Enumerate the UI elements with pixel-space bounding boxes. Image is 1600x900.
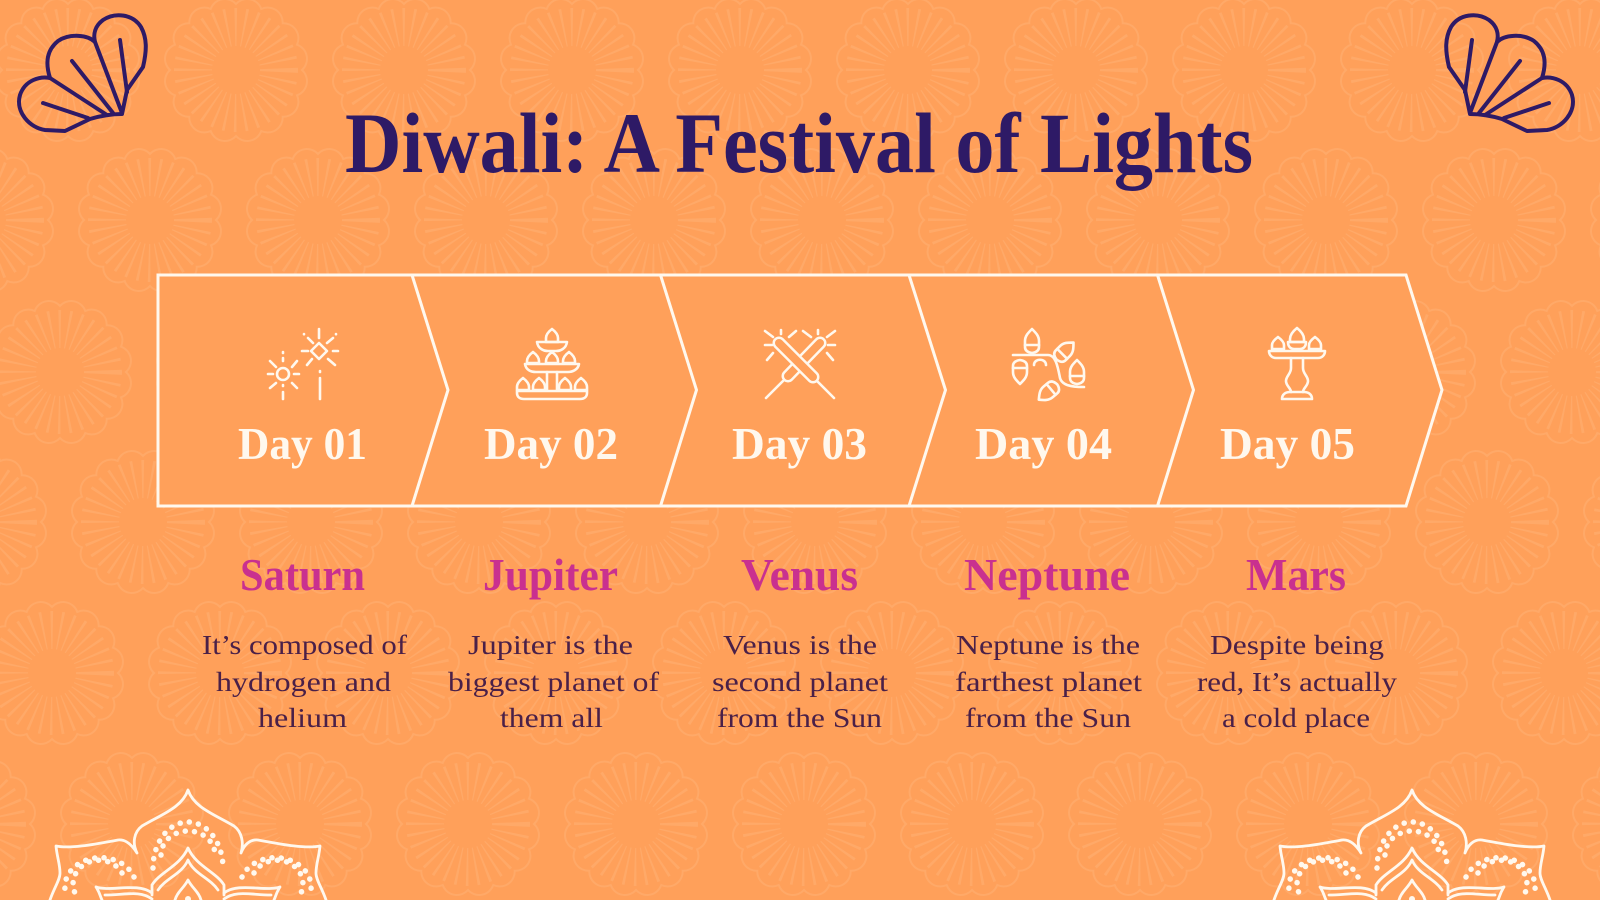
icon: corner shell top right bbox=[1446, 15, 1573, 131]
label: Day 02: Day 02 bbox=[484, 418, 618, 469]
icon: mandala bottom right bbox=[1274, 790, 1550, 900]
text: Venus description: Venus is the bbox=[723, 630, 877, 660]
text: Saturn description: hydrogen and bbox=[216, 667, 392, 697]
text: Mars description bbox=[1197, 630, 1398, 733]
heading: Neptune: Neptune bbox=[964, 549, 1130, 600]
icon: corner shell top left bbox=[19, 15, 146, 131]
column: Mars bbox=[1197, 549, 1398, 733]
icon: fireworks bbox=[268, 329, 338, 399]
text: Jupiter description: them all bbox=[500, 703, 603, 733]
heading: Venus: Venus bbox=[741, 549, 858, 600]
text: Mars description: a cold place bbox=[1222, 703, 1370, 733]
label: Day 03: Day 03 bbox=[732, 418, 867, 469]
label: Day 01: Day 01 bbox=[238, 418, 367, 469]
column: Saturn bbox=[202, 549, 407, 733]
text: Venus description: second planet bbox=[712, 667, 889, 697]
text: Jupiter description bbox=[448, 630, 659, 733]
step: Day 03 bbox=[732, 330, 867, 469]
text: Saturn description: It’s composed of bbox=[202, 630, 407, 660]
column: Neptune bbox=[955, 549, 1143, 733]
text: Venus description: from the Sun bbox=[717, 703, 883, 733]
heading: Jupiter: Jupiter bbox=[483, 549, 618, 600]
icon: tiered lamps bbox=[517, 329, 587, 399]
label: Day 04: Day 04 bbox=[975, 418, 1112, 469]
text: Saturn description bbox=[202, 630, 407, 733]
column: Jupiter bbox=[448, 549, 659, 733]
step: Day 01 bbox=[238, 329, 367, 469]
text: Neptune description: from the Sun bbox=[965, 703, 1132, 733]
step: Day 04 bbox=[975, 329, 1112, 469]
step: Day 02 bbox=[484, 329, 618, 469]
text: Neptune description: Neptune is the bbox=[956, 630, 1140, 660]
icon: string lights bbox=[1013, 329, 1084, 405]
title: Diwali: A Festival of Lights bbox=[345, 95, 1253, 191]
icon: lamp stand bbox=[1269, 328, 1325, 399]
text: Neptune description bbox=[955, 630, 1143, 733]
icon: mandala bottom left bbox=[50, 790, 326, 900]
text: Neptune description: farthest planet bbox=[955, 667, 1143, 697]
text: Saturn description: helium bbox=[258, 703, 347, 733]
text: Mars description: Despite being bbox=[1210, 630, 1384, 660]
column: Venus bbox=[712, 549, 889, 733]
chevron process frame bbox=[158, 275, 1442, 506]
heading: Saturn: Saturn bbox=[240, 549, 365, 600]
heading: Mars: Mars bbox=[1246, 549, 1346, 600]
text: Venus description bbox=[712, 630, 889, 733]
icon: crossed sparklers bbox=[765, 330, 835, 398]
text: Jupiter description: Jupiter is the bbox=[468, 630, 633, 660]
text: Jupiter description: biggest planet of bbox=[448, 667, 659, 697]
text: Mars description: red, It’s actually bbox=[1197, 667, 1398, 697]
label: Day 05: Day 05 bbox=[1220, 418, 1355, 469]
step: Day 05 bbox=[1220, 328, 1355, 469]
